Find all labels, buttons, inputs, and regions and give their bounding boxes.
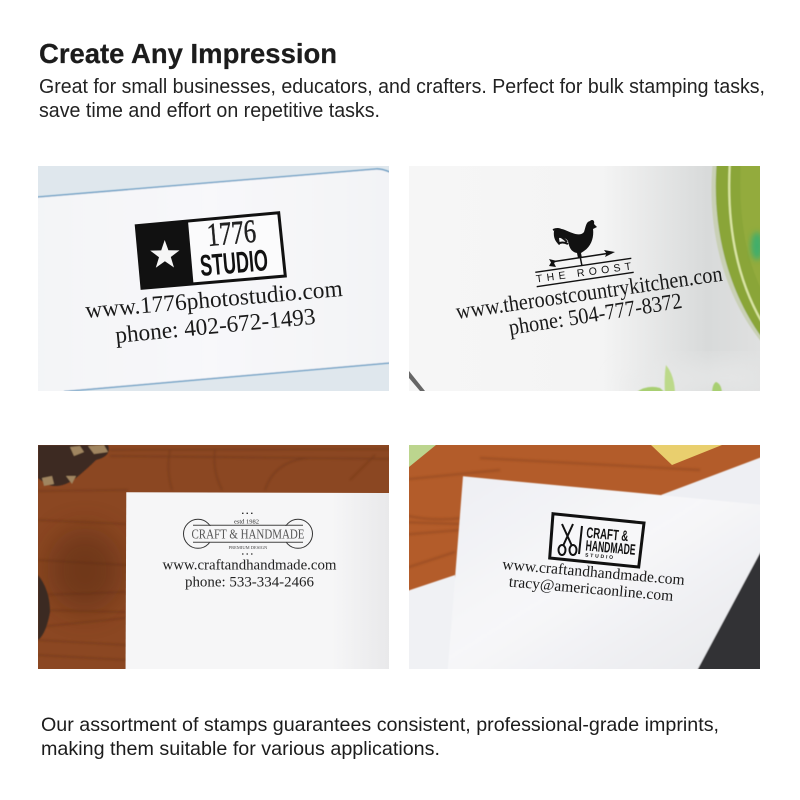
stamp text: website and phone [162,558,337,590]
dark object corner [409,371,425,391]
title: Create Any Impression [39,38,337,69]
stamp logo: rooster weather vane [535,220,634,287]
stamp logo: 1776 Studio: 1776 [206,214,258,254]
panel: Craft and Handmade stamp on wood table [38,445,400,680]
stamp logo: scissors badge: HANDMADE [585,538,636,559]
closing text: making them suitable for various applications. [41,738,440,760]
paper sheets [409,457,760,669]
stamp text: website and phone: www.craftandhandmade.com [162,558,337,574]
props: green edge and patterned cloth [409,445,436,467]
stamp text: website and phone: phone: 533-334-2466 [185,574,314,590]
stamp text: website and phone: www.1776photostudio.com [84,276,344,324]
intro text: Great for small businesses, educators, and crafters. Perfect for bulk stamping tasks, [39,75,765,98]
stamp text: website and email [502,562,684,601]
stamp logo: scissors badge: STUDIO [585,553,613,561]
stamp text: website and phone [85,285,343,348]
leaves at bottom edge [637,365,722,391]
stamp logo: Craft and Handmade badge: CRAFT & HANDMADE [192,526,304,542]
stamp text: website and email: tracy@americaonline.com [508,574,674,605]
pine cones [38,445,109,640]
stamp text: website and phone: www.theroostcountrykitchen.con [454,261,724,324]
green bowl [711,166,760,340]
panel: The Roost stamp on paper [409,160,770,395]
stamp logo: Craft and Handmade badge [184,513,312,554]
closing text [41,714,719,760]
stamp text: website and phone: phone: 402-672-1493 [114,304,317,349]
stamp logo: scissors badge: CRAFT & [586,525,629,545]
panel: 1776 Studio stamp on card [38,166,389,391]
stamp logo: 1776 Studio: STUDIO [199,244,269,283]
panel: Craft and Handmade scissors stamp on papers [409,445,760,669]
stamp logo: rooster weather vane: THE ROOST [535,260,633,285]
stamp logo: 1776 Studio [136,213,285,288]
intro text [39,75,765,122]
stamp text: website and phone: phone: 504-777-8372 [507,288,684,340]
closing text: Our assortment of stamps guarantees consistent, professional-grade imprints, [41,714,719,736]
stamp logo: Craft and Handmade badge: PREMIUM DESIGN [229,545,268,550]
wood grain [400,458,700,570]
intro text: save time and effort on repetitive tasks. [39,99,380,122]
stamp text: website and email: www.craftandhandmade.com [502,556,685,589]
paper sheet [126,492,400,680]
stamp text: website and phone [456,270,723,340]
stamp logo: scissors badge [550,514,644,567]
wood grain [38,449,400,660]
stamp logo: Craft and Handmade badge: estd 1982 [234,518,259,526]
